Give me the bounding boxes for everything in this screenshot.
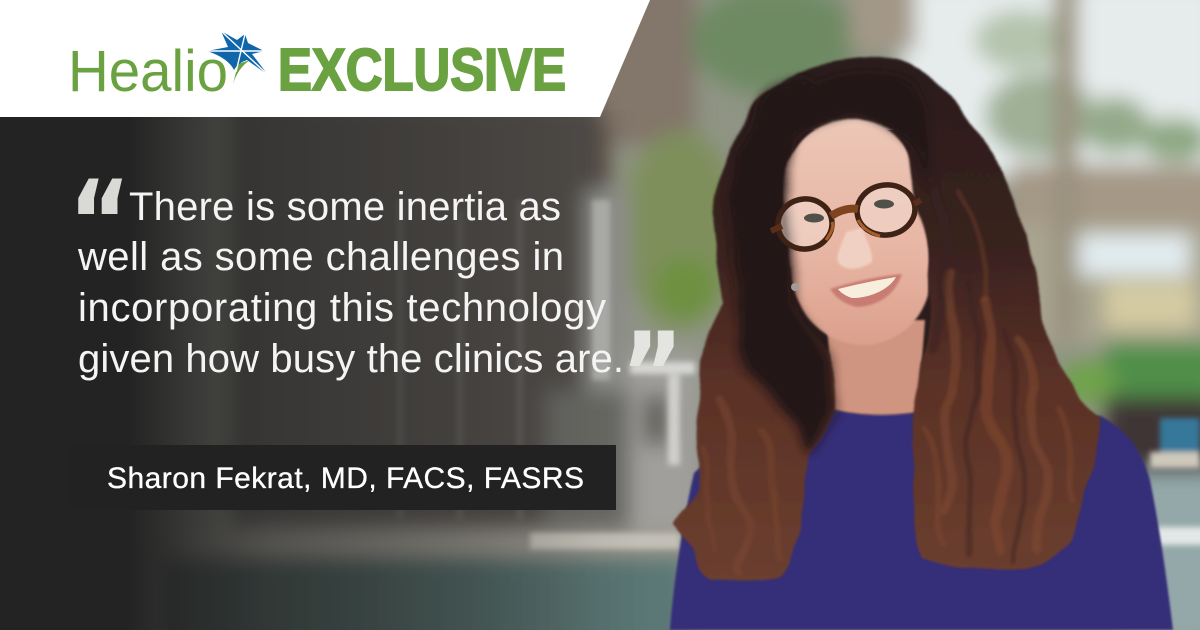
quote block bbox=[68, 155, 683, 441]
closing quotation mark: ” bbox=[621, 307, 683, 441]
copper hair waves left bbox=[705, 400, 780, 572]
face bbox=[782, 119, 929, 345]
header banner bbox=[0, 0, 650, 117]
logo wordmark: Healio bbox=[68, 39, 228, 104]
copper hair waves right bbox=[925, 190, 1072, 550]
neck bbox=[826, 320, 925, 415]
purple top bbox=[670, 409, 1173, 630]
dark gradient overlay on left bbox=[0, 110, 640, 630]
eyes bbox=[804, 200, 894, 222]
logo star icon bbox=[207, 31, 268, 84]
glasses bbox=[771, 181, 921, 253]
quote line 4: given how busy the clinics are. bbox=[78, 337, 624, 381]
EXCLUSIVE label: EXCLUSIVE bbox=[278, 37, 566, 103]
quote line 2: well as some challenges in bbox=[77, 235, 564, 279]
attribution name: Sharon Fekrat, MD, FACS, FASRS bbox=[107, 462, 584, 495]
earring bbox=[791, 283, 799, 291]
hair backing behind face bbox=[760, 130, 945, 415]
attribution bar bbox=[70, 445, 616, 510]
woman portrait bbox=[670, 56, 1173, 630]
dark left side and crown of hair bbox=[731, 73, 935, 454]
smile bbox=[830, 274, 902, 307]
Healio logo bbox=[68, 31, 268, 104]
nose bbox=[837, 228, 872, 269]
quote line 1: There is some inertia as bbox=[129, 185, 561, 229]
quote line 3: incorporating this technology bbox=[78, 286, 606, 330]
hair mass bbox=[674, 56, 1101, 580]
opening quotation mark: “ bbox=[68, 155, 131, 289]
